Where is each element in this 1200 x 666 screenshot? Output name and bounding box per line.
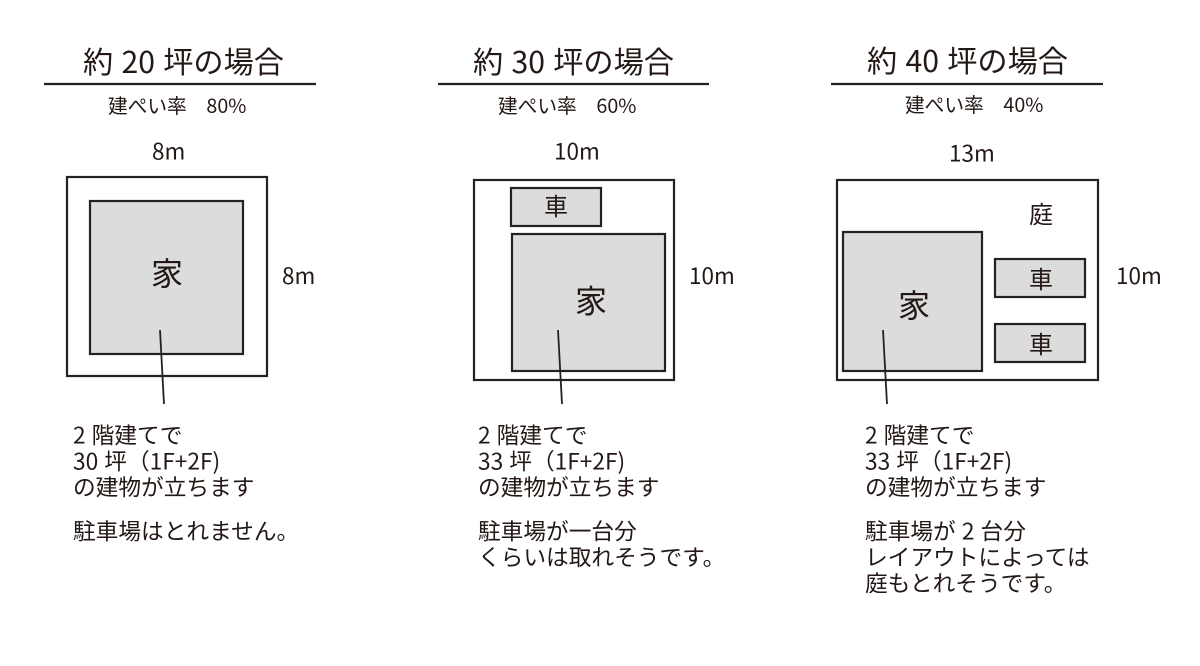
- panel: 40 tsubo: 33 坪（1F+2F): [865, 444, 1012, 476]
- coverage ratio 60%: 建ぺい率 60%: [498, 90, 636, 119]
- leader line: [883, 330, 887, 404]
- car 1: [995, 259, 1085, 297]
- house: [90, 201, 243, 354]
- width label 10m: 10m: [554, 134, 600, 166]
- lot outline: [67, 177, 267, 376]
- panel: 40 tsubo: [831, 37, 1162, 598]
- car 2 label: 車: [1029, 325, 1053, 360]
- panel: 20 tsubo: 30 坪（1F+2F): [73, 444, 220, 476]
- lot outline: [837, 180, 1098, 380]
- description: 2 階建てで: [73, 418, 182, 450]
- panel: 20 tsubo: の建物が立ちます: [73, 470, 254, 502]
- house label: 家: [575, 276, 607, 322]
- depth label 8m: 8m: [282, 259, 315, 291]
- panel: 40 tsubo: の建物が立ちます: [865, 470, 1046, 502]
- car: [511, 188, 601, 226]
- house: [512, 234, 665, 371]
- width label 8m: 8m: [152, 134, 185, 166]
- garden label: 庭: [1029, 195, 1053, 230]
- leader line: [558, 330, 562, 404]
- car label: 車: [544, 187, 568, 222]
- width label 13m: 13m: [949, 136, 995, 168]
- house label: 家: [151, 249, 183, 295]
- coverage ratio 40%: 建ぺい率 40%: [905, 89, 1043, 118]
- panel: 30 tsubo: [438, 38, 735, 572]
- car 1 label: 車: [1029, 260, 1053, 295]
- depth label 10m: 10m: [689, 259, 735, 291]
- house label: 家: [898, 281, 930, 327]
- panel: 30 tsubo: の建物が立ちます: [478, 470, 660, 502]
- coverage ratio 80%: 建ぺい率 80%: [108, 90, 246, 119]
- depth label 10m: 10m: [1116, 259, 1162, 291]
- panel: 30 tsubo: 33 坪（1F+2F): [478, 444, 625, 476]
- description: 2 階建てで: [865, 418, 974, 450]
- panel: 40 tsubo: 庭もとれそうです。: [865, 566, 1066, 598]
- title: 20 tsubo: 約 20 坪の場合: [83, 38, 284, 82]
- leader line: [160, 330, 164, 404]
- panel: 40 tsubo: レイアウトによっては: [865, 540, 1090, 572]
- panel: 30 tsubo: 駐車場が一台分: [478, 514, 637, 546]
- panel: 20 tsubo: 駐車場はとれません。: [73, 514, 299, 546]
- panel: 30 tsubo: くらいは取れそうです。: [478, 540, 725, 572]
- house: [843, 232, 982, 371]
- panel: 40 tsubo: 駐車場が 2 台分: [865, 514, 1026, 546]
- car 2: [995, 324, 1085, 362]
- title: 40 tsubo: 約 40 坪の場合: [867, 37, 1068, 81]
- description: 2 階建てで: [478, 418, 587, 450]
- lot outline: [474, 180, 674, 380]
- title: 30 tsubo: 約 30 坪の場合: [473, 38, 674, 82]
- panel: 20 tsubo: [44, 38, 316, 546]
